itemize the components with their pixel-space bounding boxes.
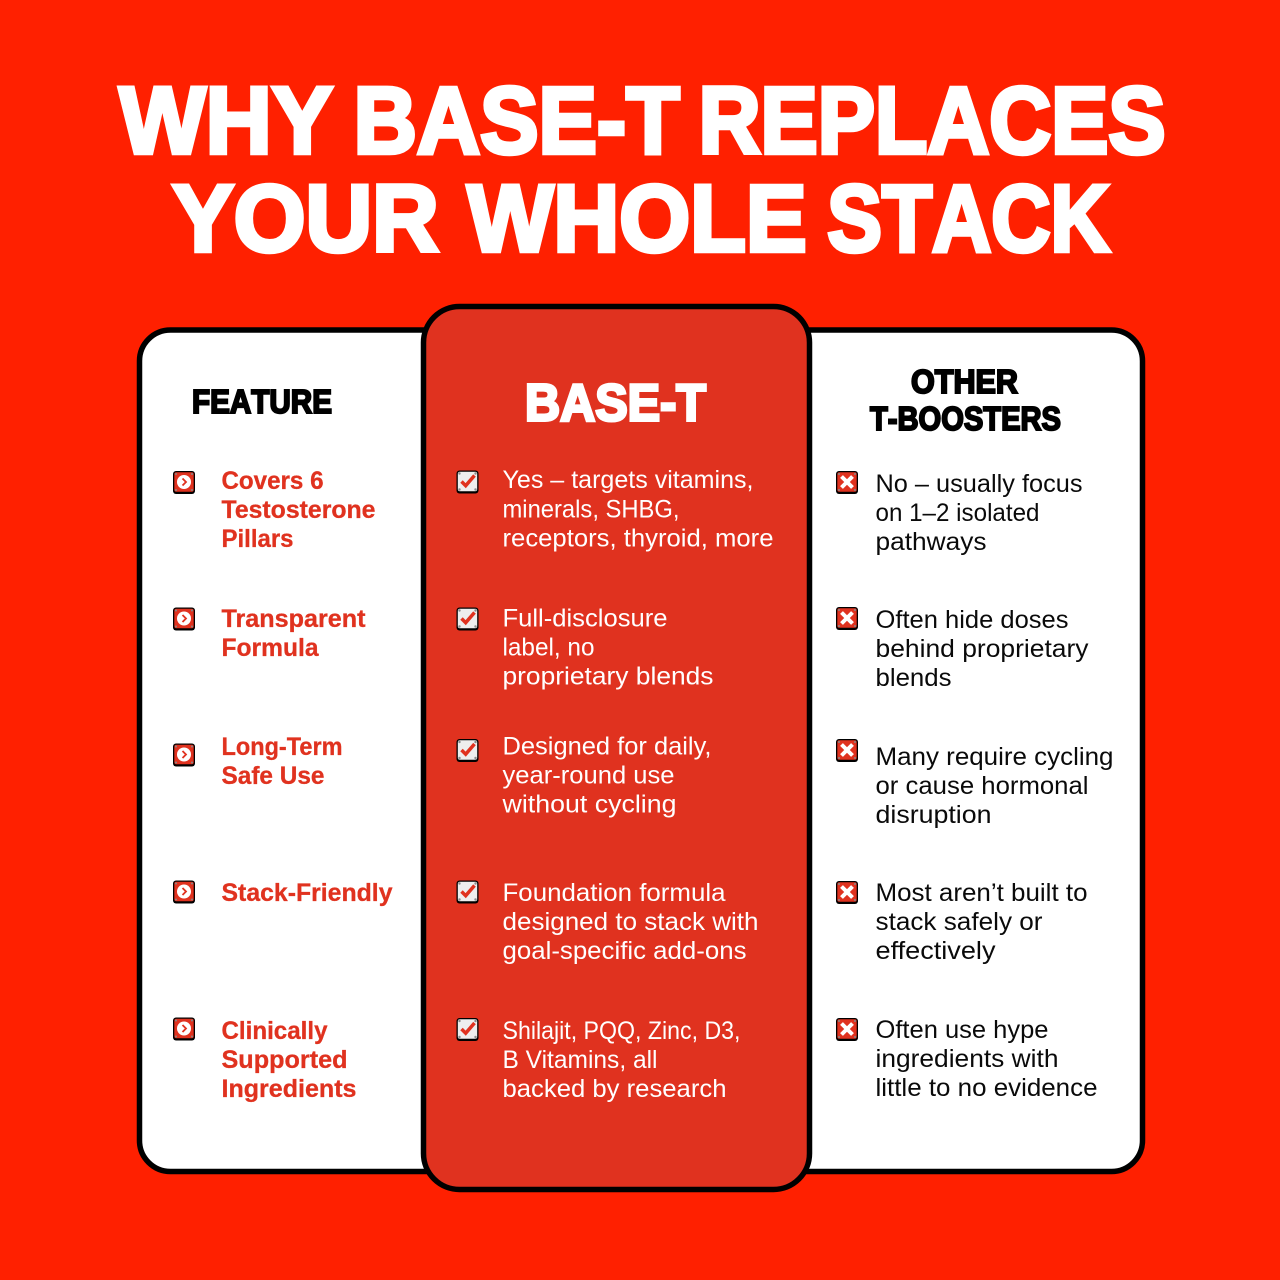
text: Shilajit, PQQ, Zinc, D3, <box>502 1017 740 1045</box>
icon: cross badge <box>836 471 858 494</box>
label: Long-Term <box>222 733 342 761</box>
icon: check badge <box>456 1018 478 1041</box>
row 5 Base-T <box>456 1017 740 1103</box>
label: Safe Use <box>222 762 325 790</box>
text: pathways <box>876 528 986 556</box>
icon: arrow badge <box>173 471 195 494</box>
label: Transparent <box>222 605 366 633</box>
label: Covers 6 <box>222 467 324 495</box>
text <box>502 1017 740 1103</box>
text: Many require cycling <box>876 743 1114 771</box>
text <box>502 879 758 965</box>
text: Designed for daily, <box>502 732 712 760</box>
title <box>119 68 1166 272</box>
label: Ingredients <box>222 1075 356 1103</box>
text: on 1–2 isolated <box>876 499 1040 527</box>
title: WHY <box>119 68 333 174</box>
row 5 other <box>836 1016 1098 1102</box>
heading: other T-boosters: T-BOOSTERS <box>870 400 1061 437</box>
text: little to no evidence <box>876 1074 1098 1102</box>
title: REPLACES <box>699 68 1166 174</box>
title: WHOLE <box>467 166 807 272</box>
row 5 feature <box>173 1017 356 1103</box>
text: minerals, SHBG, <box>502 496 680 524</box>
icon: arrow badge <box>173 744 195 766</box>
text: designed to stack with <box>502 908 758 936</box>
text: Foundation formula <box>502 879 726 907</box>
heading: other T-boosters: OTHER <box>911 363 1018 400</box>
text: B Vitamins, all <box>502 1046 658 1074</box>
text: Most aren’t built to <box>876 879 1088 907</box>
row 4 other <box>836 879 1088 965</box>
icon: check badge <box>456 739 478 762</box>
row 4 Base-T <box>456 879 758 965</box>
row 1 other <box>836 470 1082 556</box>
row 1 Base-T <box>456 466 774 552</box>
text: Often hide doses <box>876 606 1068 634</box>
text <box>876 470 1082 556</box>
text: year-round use <box>502 762 674 790</box>
title: YOUR <box>172 166 439 272</box>
heading: Base-T: BASE-T <box>525 374 706 432</box>
icon: arrow badge <box>173 880 195 904</box>
text: without cycling <box>501 790 676 818</box>
text <box>876 743 1114 829</box>
icon: cross badge <box>836 607 858 630</box>
text: proprietary blends <box>502 662 714 690</box>
icon: cross badge <box>836 881 858 904</box>
text: effectively <box>876 937 996 965</box>
icon: check badge <box>456 470 478 494</box>
text: receptors, thyroid, more <box>502 524 774 552</box>
text: stack safely or <box>876 908 1042 936</box>
text: disruption <box>876 801 992 829</box>
icon: arrow badge <box>173 1018 195 1040</box>
text: backed by research <box>502 1075 726 1103</box>
row 1 feature <box>173 467 376 553</box>
row 2 Base-T <box>456 604 714 690</box>
title: BASE-T <box>354 68 680 174</box>
label: Pillars <box>222 525 294 553</box>
row 2 feature <box>173 605 366 662</box>
label <box>222 1017 356 1103</box>
panel: feature column <box>173 383 393 1103</box>
panel: other T-boosters column <box>836 363 1114 1102</box>
icon: cross badge <box>836 1018 858 1041</box>
label: Supported <box>222 1046 348 1074</box>
row 3 Base-T <box>456 732 712 818</box>
panel: Base-T column <box>424 306 810 1190</box>
row 3 other <box>836 739 1114 829</box>
text: ingredients with <box>876 1045 1058 1073</box>
text: label, no <box>502 634 594 662</box>
text <box>876 606 1089 692</box>
label: Formula <box>222 634 320 662</box>
label <box>222 733 342 790</box>
text: No – usually focus <box>876 470 1082 498</box>
text: or cause hormonal <box>876 772 1088 800</box>
label: Clinically <box>222 1017 328 1045</box>
text: behind proprietary <box>876 635 1089 663</box>
icon: cross badge <box>836 739 858 762</box>
text: Full-disclosure <box>502 604 668 632</box>
column background <box>424 306 810 1190</box>
text: Yes – targets vitamins, <box>502 466 754 494</box>
text <box>876 879 1088 965</box>
text <box>502 466 774 552</box>
heading: feature: FEATURE <box>192 383 332 420</box>
text: blends <box>876 664 952 692</box>
title: STACK <box>827 166 1110 272</box>
text <box>501 732 712 818</box>
text: goal-specific add-ons <box>502 937 746 965</box>
icon: check badge <box>456 608 478 630</box>
row 4 feature <box>173 879 393 907</box>
panel: white comparison card <box>140 330 1142 1172</box>
text: Often use hype <box>876 1016 1048 1044</box>
text <box>876 1016 1098 1102</box>
label: Testosterone <box>222 496 376 524</box>
row 2 other <box>836 606 1089 692</box>
text <box>502 604 714 690</box>
label: Stack-Friendly <box>222 879 393 907</box>
row 3 feature <box>173 733 342 790</box>
label <box>222 605 366 662</box>
icon: arrow badge <box>173 608 195 630</box>
heading: other T-boosters <box>870 363 1061 437</box>
icon: check badge <box>456 880 478 904</box>
label <box>222 467 376 553</box>
